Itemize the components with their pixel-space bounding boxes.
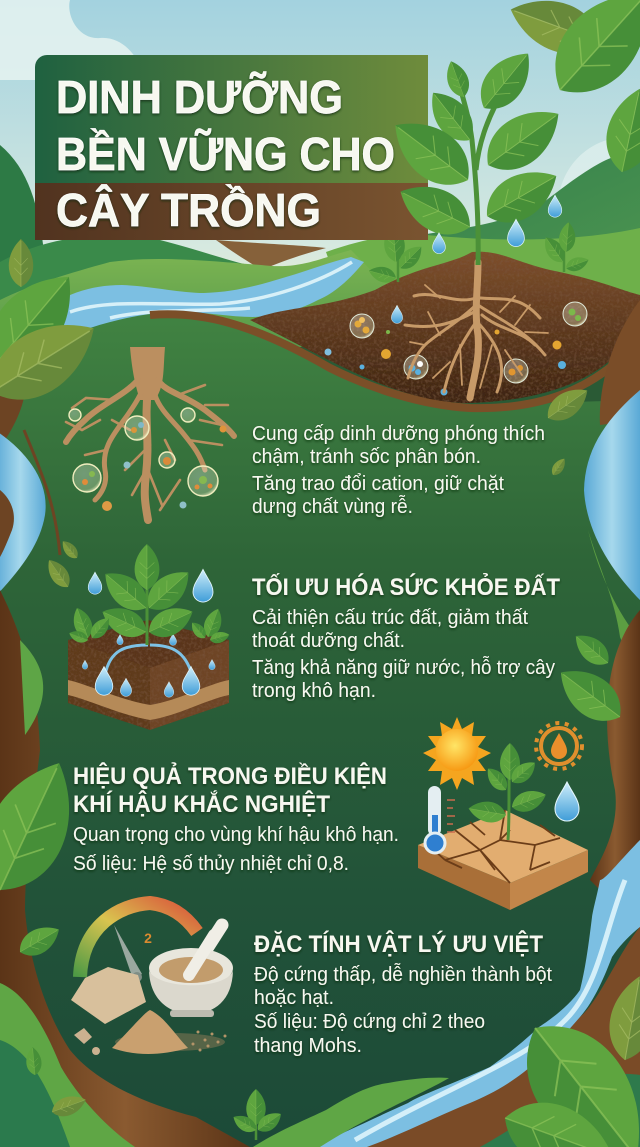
text block: physical properties: thang Mohs.: [254, 1035, 362, 1057]
text block: slow release: chậm, tránh sốc phân bón.: [252, 446, 481, 468]
rock: [71, 967, 146, 1024]
thermometer: [425, 786, 455, 853]
clouds: [0, 0, 640, 230]
text block: soil health: [252, 572, 560, 702]
drought plant: [467, 743, 549, 840]
text block: harsh climate: Quan trọng cho vùng khí hậu khô hạn.: [73, 824, 399, 846]
small stones: [74, 1028, 100, 1055]
light green river bank: [0, 250, 400, 400]
text block: slow release: [252, 423, 545, 518]
main green panel: [0, 312, 640, 1147]
mortar: [149, 935, 233, 1017]
text block: slow release: dưng chất vùng rễ.: [252, 495, 413, 518]
icon: roots with nutrient bubbles: [66, 347, 234, 520]
main plant: [381, 42, 572, 265]
left border vines and river: [0, 370, 250, 1147]
bottom seedling: [230, 1089, 285, 1140]
title text: CÂY TRỒNG: [56, 184, 321, 236]
text block: physical properties: hoặc hạt.: [254, 987, 334, 1009]
text block: harsh climate: HIỆU QUẢ TRONG ĐIỀU KIỆN: [73, 761, 387, 790]
text block: soil health: trong khô hạn.: [252, 680, 376, 702]
text block: soil health: Tăng khả năng giữ nước, hỗ trợ cây: [252, 656, 555, 679]
cube water drops: [82, 570, 215, 697]
title text: [56, 71, 395, 236]
text block: slow release: Cung cấp dinh dưỡng phóng thích: [252, 423, 545, 445]
text block: physical properties: ĐẶC TÍNH VẬT LÝ ƯU VIỆT: [254, 930, 543, 958]
soil nutrient bubbles: [350, 302, 587, 383]
cracked soil block: [418, 810, 588, 910]
text block: soil health: thoát dưỡng chất.: [252, 630, 405, 652]
right small leaves: [541, 380, 632, 733]
sun: [423, 717, 491, 790]
brown ridge under soil: [150, 314, 630, 408]
cube water channels: [105, 645, 192, 675]
cube plants: [67, 544, 231, 645]
top right leaves: [502, 0, 640, 177]
icon: cracked earth with sun, thermometer and drop: [418, 717, 588, 910]
root bubbles: [69, 408, 218, 496]
gauge needle: [114, 925, 142, 982]
pestle: [190, 925, 222, 975]
text block: slow release: Tăng trao đổi cation, giữ chặt: [252, 473, 504, 495]
left leaves: [0, 239, 110, 1121]
bottom green hills: [253, 1074, 640, 1147]
text block: harsh climate: Số liệu: Hệ số thủy nhiệt chỉ 0,8.: [73, 853, 349, 875]
bottom river: [310, 840, 640, 1147]
icon: soil cube with water: [67, 544, 231, 730]
gauge number: 2: [144, 930, 152, 946]
title text: BỀN VỮNG CHO: [56, 128, 395, 180]
icon: hardness gauge with mortar and minerals: [71, 903, 233, 1055]
text block: soil health: TỐI ƯU HÓA SỨC KHỎE ĐẤT: [252, 572, 560, 601]
main plant roots: [405, 262, 548, 398]
bottom brown band: [367, 927, 640, 1147]
powder pile: [112, 1010, 226, 1054]
text block: physical properties: [254, 930, 552, 1057]
bottom right leaves: [494, 973, 640, 1147]
heat gauge sun: [536, 723, 582, 769]
root nutrient dots: [82, 422, 226, 511]
text block: harsh climate: [73, 761, 399, 875]
gauge arc: [80, 903, 197, 977]
text block: physical properties: Độ cứng thấp, dễ nghiền thành bột: [254, 963, 552, 986]
soil nutrient dots: [324, 308, 581, 396]
soil mound: [250, 252, 640, 403]
small seedlings on the hill: [367, 221, 591, 285]
text block: physical properties: Số liệu: Độ cứng chỉ 2 theo: [254, 1011, 485, 1033]
title text: DINH DƯỠNG: [56, 71, 343, 123]
water drops above soil: [433, 195, 562, 254]
text block: harsh climate: KHÍ HẬU KHẮC NGHIỆT: [73, 790, 330, 818]
upper river: [40, 257, 364, 345]
distant hills: [0, 145, 640, 320]
water drop: [555, 782, 579, 821]
right border vines and river: [584, 300, 640, 930]
sky background: [0, 0, 640, 330]
text block: soil health: Cải thiện cấu trúc đất, giảm thất: [252, 607, 528, 629]
title panel: [35, 55, 428, 240]
